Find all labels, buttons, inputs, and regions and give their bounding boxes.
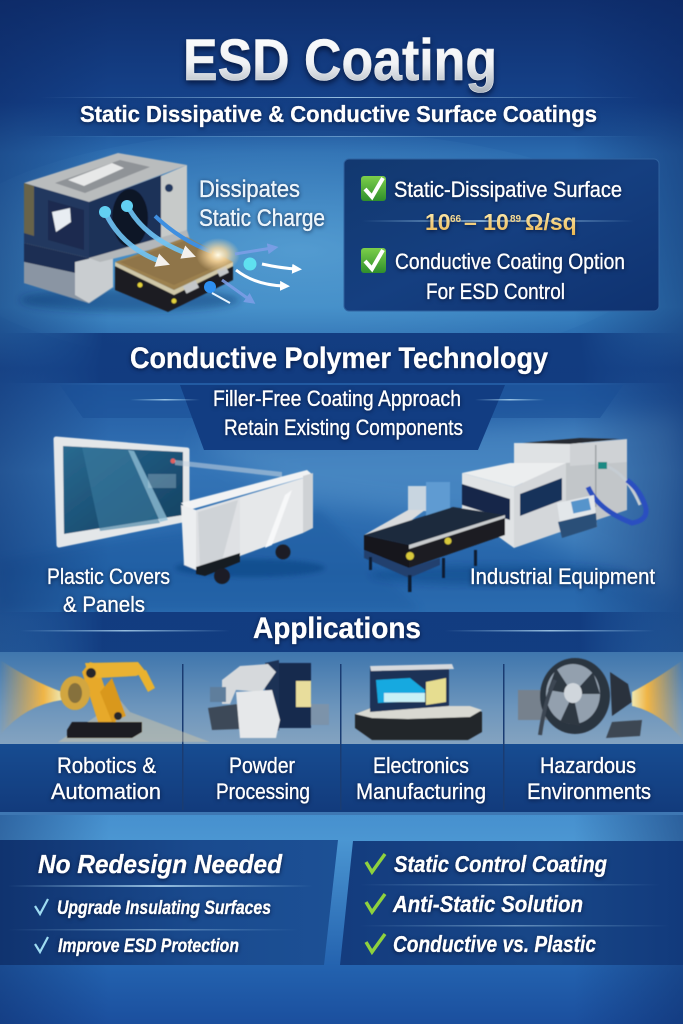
panel: no redesign needed: [0, 840, 338, 965]
icon: coating machine with static-dissipating tray: [20, 153, 240, 312]
resistivity range: 89: [510, 214, 522, 225]
resistivity range: – 10: [464, 209, 509, 235]
resistivity range: Ω/sq: [525, 209, 577, 235]
label: electronics manufacturing: [356, 753, 486, 804]
banner: filler-free approach: Retain Existing Components: [224, 415, 463, 440]
label: industrial equipment: Industrial Equipment: [470, 564, 655, 589]
label: powder processing: Processing: [216, 779, 310, 804]
label: plastic covers and panels: & Panels: [63, 592, 145, 617]
heading: conductive polymer technology: Conductive Polymer Technology: [130, 342, 548, 375]
panel: coating benefits: Anti-Static Solution: [392, 891, 583, 917]
icon: plastic monitor panel and cabinet: [56, 439, 325, 584]
heading: conductive polymer technology: [0, 333, 683, 383]
icon: check mark: [35, 937, 48, 952]
icon: powder processing machine: [208, 660, 329, 738]
resistivity range: 66: [450, 214, 462, 225]
panel: applications strip: [0, 652, 683, 815]
icon: check mark: [366, 854, 385, 872]
panel: surface specifications: Conductive Coating Option: [395, 249, 625, 274]
banner: filler-free approach: Filler-Free Coating Approach: [213, 386, 461, 411]
label: electronics manufacturing: Manufacturing: [356, 779, 486, 804]
panel: no redesign needed: No Redesign Needed: [38, 849, 283, 879]
heading: applications: [0, 612, 683, 652]
resistivity range: 10: [425, 209, 451, 235]
label: plastic covers and panels: Plastic Covers: [47, 564, 170, 589]
title: ESD Coating: [183, 28, 497, 93]
icon: robot arm: [0, 660, 210, 742]
label: dissipates static charge: [199, 176, 325, 232]
icon: electronics manufacturing unit: [355, 664, 482, 740]
label: powder processing: [216, 753, 310, 804]
label: robotics and automation: [51, 753, 161, 804]
subtitle banner: Static Dissipative & Conductive Surface Coatings: [80, 101, 597, 127]
label: dissipates static charge: Dissipates: [199, 176, 300, 203]
icon: check box: [361, 248, 386, 273]
panel: surface specifications: Static-Dissipative Surface: [394, 177, 622, 202]
panel: surface specifications: [344, 159, 659, 311]
heading: applications: Applications: [253, 612, 421, 645]
panel: surface specifications: For ESD Control: [426, 279, 565, 304]
icon: check mark: [35, 899, 48, 914]
banner: filler-free approach: [60, 385, 623, 450]
label: robotics and automation: Robotics &: [57, 753, 156, 778]
label: hazardous environments: [527, 753, 651, 804]
label: plastic covers and panels: [47, 564, 170, 617]
panel: no redesign needed: Upgrade Insulating Surfaces: [57, 898, 271, 919]
label: dissipates static charge: Static Charge: [199, 205, 325, 232]
icon: hazardous environment fan: [518, 658, 683, 740]
icon: industrial conveyor equipment: [364, 438, 646, 592]
panel: coating benefits: Static Control Coating: [394, 851, 607, 877]
icon: check box: [361, 176, 386, 201]
icon: check mark: [366, 934, 385, 952]
subtitle banner: [20, 97, 663, 137]
panel: no redesign needed: Improve ESD Protection: [58, 936, 239, 957]
icon: check mark: [366, 894, 385, 912]
arrows: static charge flow: [99, 200, 296, 303]
panel: coating benefits: Conductive vs. Plastic: [393, 931, 596, 957]
label: electronics manufacturing: Electronics: [373, 753, 469, 778]
panel: coating benefits: [340, 841, 683, 965]
label: powder processing: Powder: [229, 753, 295, 778]
label: hazardous environments: Hazardous: [540, 753, 636, 778]
label: hazardous environments: Environments: [527, 779, 651, 804]
label: robotics and automation: Automation: [51, 779, 161, 804]
